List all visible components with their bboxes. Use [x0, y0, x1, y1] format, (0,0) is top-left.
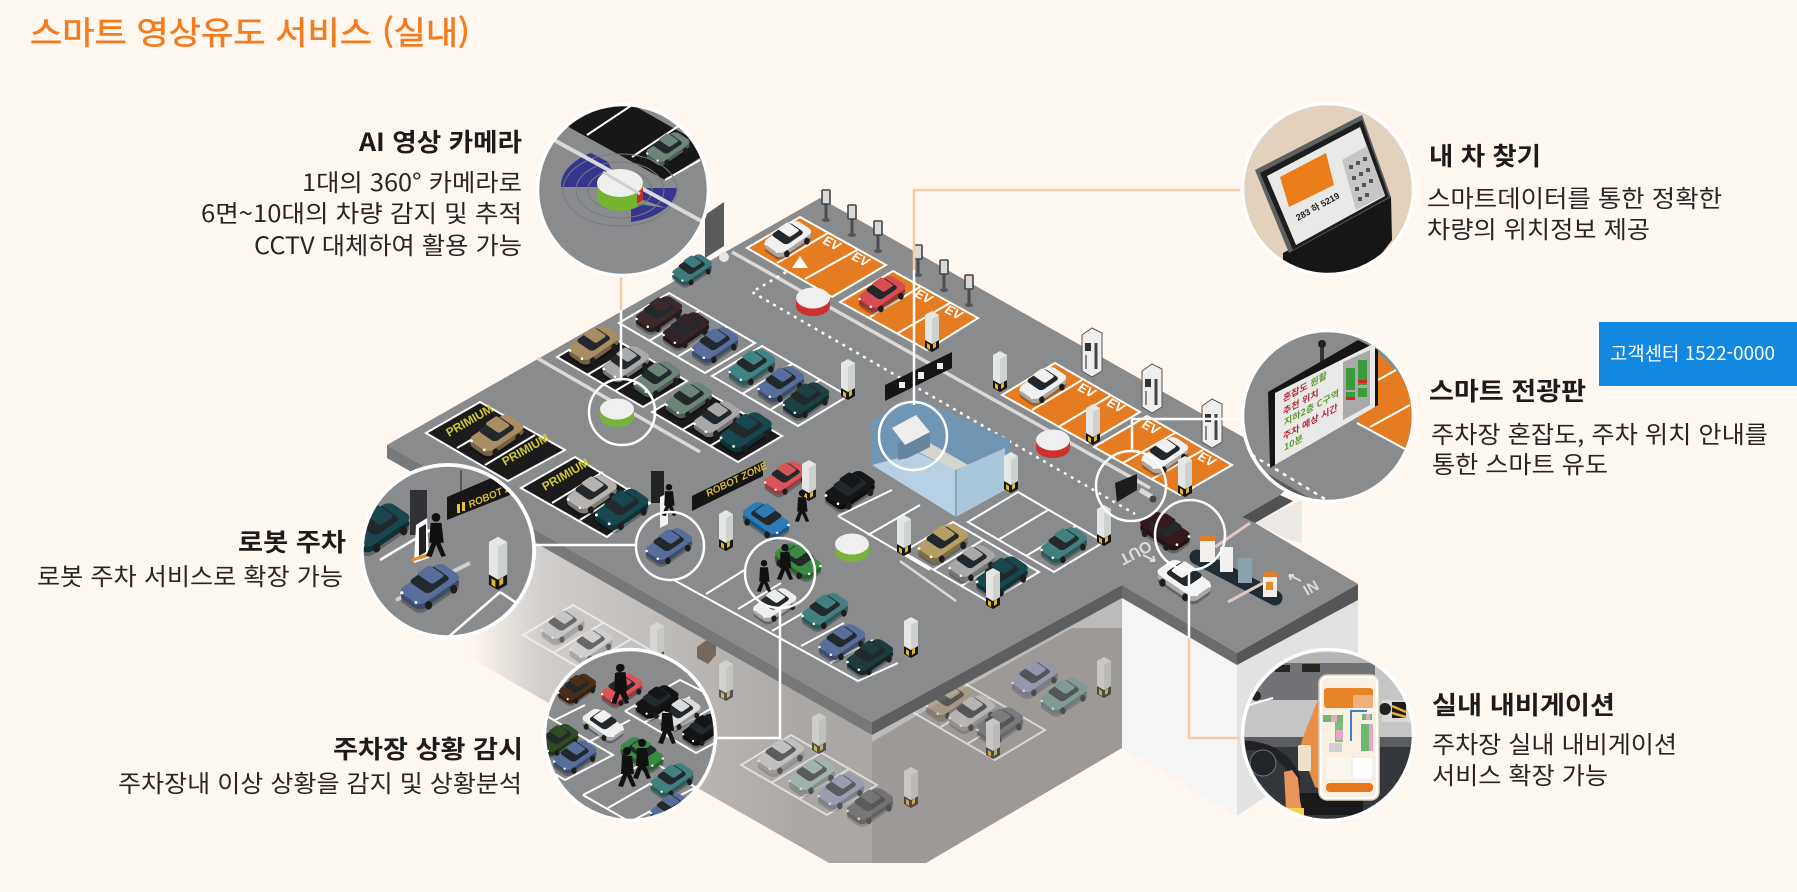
panel: AI camera circle: [530, 92, 720, 280]
robot zone signs: [651, 460, 770, 528]
title: 스마트 영상유도 서비스 (실내): [30, 8, 470, 54]
parking structure illustration: [387, 190, 1358, 863]
panel: smart display circle: [1241, 329, 1415, 503]
entry and exit gate: [1116, 523, 1322, 602]
panel: smart display circle: 혼잡도 원활: [1283, 368, 1327, 405]
lane lines: [537, 252, 1150, 601]
parking stalls: [557, 293, 1104, 681]
slab edges: [387, 445, 1358, 735]
text: AI camera: CCTV 대체하여 활용 가능: [254, 226, 522, 261]
text: parking monitoring: 주차장 상황 감시: [333, 730, 523, 766]
text: find my car: 내 차 찾기: [1429, 137, 1541, 173]
overhead black sign: [885, 352, 952, 401]
panel: smart display circle: 추천 위치: [1283, 385, 1319, 418]
EV chargers: [822, 190, 1222, 448]
panel: robot parking circle: [360, 463, 536, 639]
text: parking monitoring: 주차장내 이상 상황을 감지 및 상황분석: [118, 764, 522, 799]
premium stalls: PRIMIUM: [540, 455, 592, 494]
EV charging stalls: EV: [1076, 379, 1099, 401]
white building walls: [1122, 500, 1358, 816]
entry and exit gate: OUT: [1116, 536, 1154, 567]
360 cameras on deck: [600, 288, 1070, 562]
text: robot parking: 로봇 주차: [238, 523, 346, 559]
ramp door box: [705, 202, 729, 262]
EV charging stalls: EV: [913, 285, 936, 307]
entry and exit gate: IN: [1300, 577, 1322, 599]
panel: smart display circle: 주차 예상 시간: [1283, 400, 1338, 443]
panel: parking monitoring circle: [543, 648, 718, 822]
EV charging stalls: [747, 217, 1232, 495]
roof deck surface: [387, 198, 1358, 722]
text: AI camera: AI 영상 카메라: [358, 123, 522, 159]
text: smart display: [1429, 372, 1768, 480]
premium stalls: PRIMIUM: [500, 430, 552, 469]
panel: robot parking circle: ROBOT ZONE: [467, 474, 533, 511]
text: indoor navigation: 서비스 확장 가능: [1432, 756, 1608, 791]
EV charging stalls: EV: [1140, 416, 1163, 438]
cars on deck: [468, 219, 1213, 680]
small focus circles: [589, 379, 1225, 608]
glass kiosk room: [872, 398, 1010, 517]
EV charging stalls: EV: [821, 232, 844, 254]
text: robot parking: 로봇 주차 서비스로 확장 가능: [37, 557, 343, 592]
coverage sectors: [561, 153, 677, 222]
text: indoor navigation: [1432, 686, 1677, 791]
panel: smart display circle: 10분: [1284, 430, 1303, 454]
premium stalls: [426, 401, 650, 537]
text: AI camera: 1대의 360° 카메라로: [302, 163, 522, 198]
premium stalls: PRIMIUM: [444, 401, 496, 440]
text: AI camera: [201, 123, 522, 261]
text: smart display: 통한 스마트 유도: [1432, 445, 1608, 480]
text: indoor navigation: 주차장 실내 내비게이션: [1432, 725, 1677, 760]
text: parking monitoring: [118, 730, 523, 799]
text: find my car: 스마트데이터를 통한 정확한: [1427, 179, 1722, 214]
pillars: [719, 311, 1192, 658]
customer center badge: 고객센터 1522-0000: [1610, 339, 1775, 366]
text: indoor navigation: 실내 내비게이션: [1432, 686, 1615, 722]
panel: indoor navigation circle: [1240, 648, 1420, 827]
text: AI camera: 6면~10대의 차량 감지 및 추적: [201, 194, 522, 229]
people on deck: [662, 484, 809, 592]
panel: find my car circle: [1241, 102, 1415, 276]
text: robot parking: [37, 523, 346, 592]
panel: smart display circle: 지하2층 C구역: [1284, 385, 1339, 429]
robot zone signs: ROBOT ZONE: [704, 460, 770, 500]
connector lines: [535, 190, 1240, 738]
customer center badge: [1599, 322, 1797, 386]
text: find my car: 차량의 위치정보 제공: [1427, 210, 1650, 245]
panel: find my car circle: 283 하 5219: [1294, 190, 1341, 223]
text: find my car: [1427, 137, 1722, 245]
lower floor: [470, 490, 1122, 863]
text: smart display: 스마트 전광판: [1429, 372, 1586, 408]
camera and dark panel near exit: [1115, 474, 1156, 502]
EV charging stalls: EV: [1196, 448, 1219, 470]
EV charging stalls: EV: [850, 248, 873, 270]
text: smart display: 주차장 혼잡도, 주차 위치 안내를: [1431, 415, 1768, 450]
EV charging stalls: EV: [1105, 394, 1128, 416]
EV charging stalls: EV: [943, 301, 966, 323]
